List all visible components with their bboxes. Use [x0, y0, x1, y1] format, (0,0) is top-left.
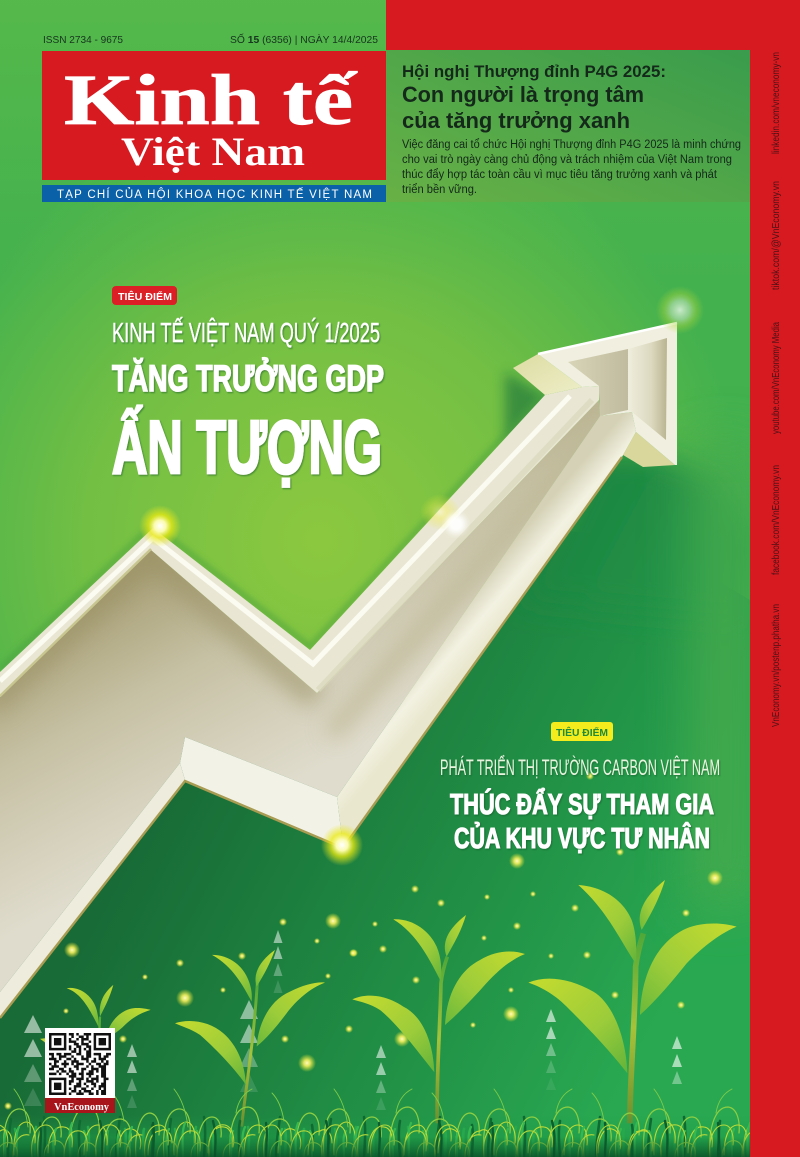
issue line left: ISSN 2734 - 9675: [43, 34, 123, 46]
story kicker: Hội nghị Thượng đỉnh P4G 2025:: [402, 62, 666, 81]
masthead logo: Kinh tế: [64, 60, 358, 140]
side social links: VnEconomy.vn/postenp.phatha.vn: [771, 604, 782, 727]
plant third: [352, 915, 525, 1123]
yellow focus badge: TIÊU ĐIỂM: [556, 726, 608, 739]
arrow soft shadow: [505, 372, 548, 445]
red corner and side strip: [386, 0, 800, 1157]
lead story titles: [112, 317, 384, 489]
side social links: [771, 52, 782, 727]
grass foreground: [0, 1087, 760, 1157]
lead story titles: KINH TẾ VIỆT NAM QUÝ 1/2025: [112, 317, 380, 348]
masthead tagline bar: TẠP CHÍ CỦA HỘI KHOA HỌC KINH TẾ VIỆT NAM: [57, 188, 372, 201]
side social links: youtube.com/VnEconomy Media: [771, 322, 782, 434]
story headline: Con người là trọng tâm: [402, 82, 644, 107]
story summary: cho vai trò ngày càng chủ động và trách nhiệm của Việt Nam trong: [402, 154, 732, 166]
second story titles: CỦA KHU VỰC TƯ NHÂN: [454, 822, 710, 855]
plant second: [175, 950, 325, 1127]
plant right: [528, 880, 737, 1123]
yellow focus badge: [551, 722, 613, 741]
lead story titles: ẤN TƯỢNG: [112, 405, 382, 489]
story headline: của tăng trưởng xanh: [402, 108, 630, 133]
red focus badge: TIÊU ĐIỂM: [118, 290, 172, 303]
decorative firefly dots: [4, 772, 723, 1110]
decorative rising triangles: [24, 930, 682, 1110]
arrow lower rib: [0, 412, 636, 1018]
light flares on the arrow: [139, 286, 704, 866]
second story titles: THÚC ĐẨY SỰ THAM GIA: [450, 789, 714, 821]
story headline: [402, 82, 644, 133]
second story block: [440, 722, 720, 855]
lead story titles: TĂNG TRƯỞNG GDP: [112, 357, 384, 399]
lead story block: [112, 286, 384, 489]
arrow chart line: [0, 286, 704, 1018]
side social links: linkedin.com/vneconomy-vn: [771, 52, 782, 154]
red focus badge: [112, 286, 177, 305]
masthead logo: [42, 51, 386, 180]
story summary: Việc đăng cai tổ chức Hội nghị Thượng đỉnh P4G 2025 là minh chứng: [402, 139, 741, 151]
QR modules: [49, 1034, 111, 1094]
plant far left: [40, 985, 151, 1113]
QR code with VnEconomy label: [45, 1028, 115, 1113]
story summary: [402, 139, 741, 196]
masthead tagline bar: [42, 185, 386, 202]
masthead logo: Việt Nam: [121, 129, 305, 174]
panel: P4G summit story: [386, 50, 750, 202]
story summary: thúc đẩy hợp tác toàn cầu vì mục tiêu tăng trưởng xanh và phát: [402, 169, 718, 181]
QR label: VnEconomy: [54, 1102, 110, 1113]
side social links: tiktok.com/@VnEconomy.vn: [771, 181, 782, 290]
arrow body face: [0, 400, 600, 992]
side social links: facebook.com/VnEconomy.vn: [771, 465, 782, 575]
second story titles: [440, 755, 720, 855]
arrow head: [513, 323, 677, 467]
issue line right: SỐ 15 (6356) | NGÀY 14/4/2025: [230, 32, 378, 46]
arrow upper rib: [0, 386, 599, 697]
story summary: triển bền vững.: [402, 184, 477, 196]
